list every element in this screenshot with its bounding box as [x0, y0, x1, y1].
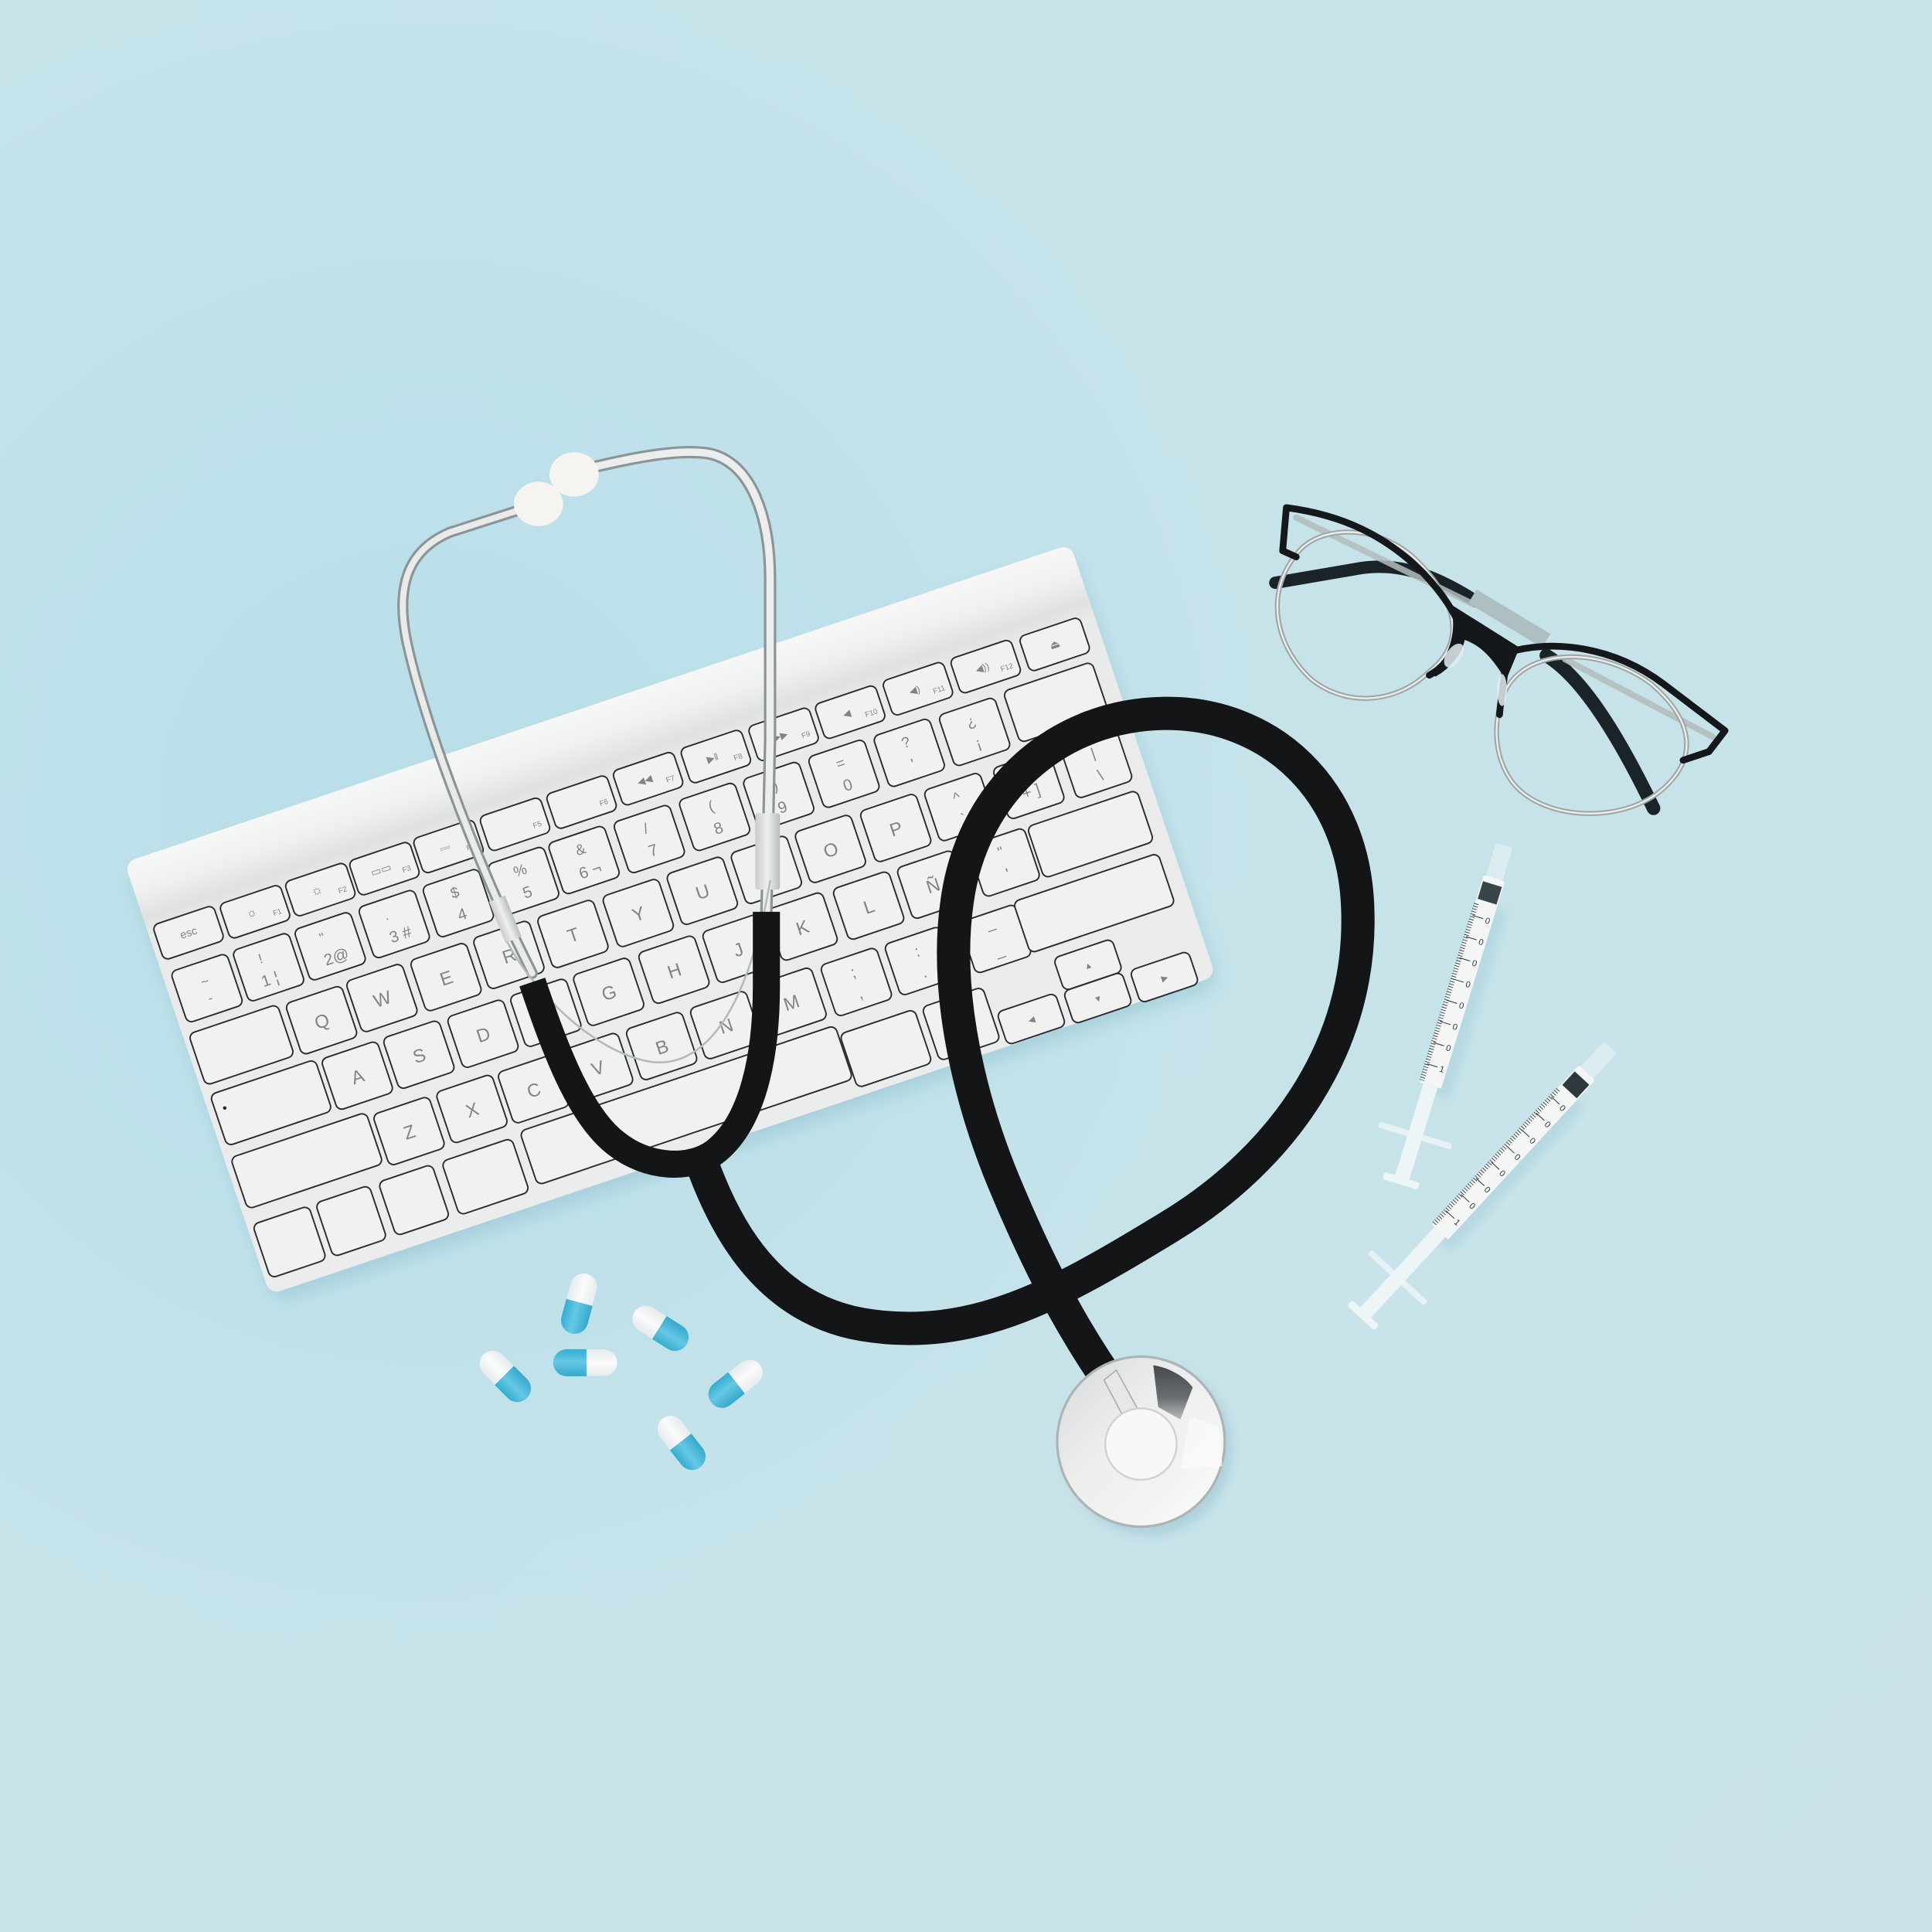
keyboard function row: ▫▫▫ — [438, 841, 452, 855]
keyboard — [124, 544, 1219, 1304]
syringe barrel: 0 — [1527, 1136, 1537, 1146]
keyboard number row: 2@ — [321, 944, 351, 970]
keyboard function row: ☼ — [244, 905, 259, 921]
Y tube — [532, 912, 767, 1164]
keyboard home row: Ñ — [923, 874, 943, 898]
keyboard number row: ' — [909, 756, 917, 774]
pill 1 — [558, 1270, 600, 1337]
syringe bottom — [1332, 1022, 1638, 1344]
syringe shadow — [1433, 1091, 1585, 1253]
chestpiece highlight — [1180, 1417, 1223, 1469]
syringe cap — [1485, 842, 1512, 883]
keyboard number row: " — [318, 930, 327, 946]
chestpiece disc — [1057, 1356, 1225, 1526]
keyboard function row: F12 — [999, 662, 1015, 674]
binaural left metal tube — [403, 503, 543, 974]
keyboard number row: 6 ¬ — [577, 859, 604, 883]
keyboard function row: ▭▭ — [369, 861, 393, 879]
keyboard function row: ▶▶ — [771, 728, 789, 743]
keyboard function row: F4 — [465, 842, 477, 852]
keyboard number row: ) — [770, 777, 781, 794]
keyboard lower letter row: : — [912, 943, 922, 961]
keyboard function row: F6 — [598, 798, 610, 808]
syringe barrel: 1 — [1452, 1218, 1462, 1228]
pill 4 — [553, 1349, 617, 1376]
keyboard home row: F — [538, 1002, 555, 1026]
syringe barrel — [1432, 1084, 1577, 1240]
keyboard number row: $ — [448, 884, 462, 903]
keyboard QWERTY row: I — [761, 861, 773, 882]
keyboard lower letter row: Z — [401, 1121, 418, 1145]
main tube — [702, 713, 1358, 1378]
keyboard number row: ~ — [199, 973, 211, 990]
glasses — [1275, 508, 1725, 814]
syringe plunger — [1332, 1206, 1468, 1344]
glasses temple arms — [1275, 518, 1713, 808]
keyboard number row: 0 — [841, 776, 855, 795]
keyboard function row: esc — [179, 925, 199, 942]
chestpiece neck — [1104, 1370, 1144, 1427]
keyboard function row: F2 — [337, 885, 349, 896]
keyboard number row: % — [512, 862, 529, 881]
keyboard lower letter row: C — [525, 1079, 544, 1103]
keyboard function row: F7 — [665, 774, 676, 785]
pill 6 — [651, 1410, 711, 1475]
keyboard bottom row: ◀ — [1027, 1015, 1036, 1026]
keyboard number row: 5 — [521, 883, 535, 903]
pill 3 — [474, 1345, 536, 1408]
syringe plunger — [1363, 1074, 1467, 1196]
keyboard QWERTY row — [189, 729, 1133, 1086]
keyboard lower letter row: B — [653, 1036, 672, 1060]
keyboard function row: ⏏ — [1048, 638, 1062, 652]
syringe barrel: 0 — [1451, 1022, 1458, 1032]
syringe top — [1363, 834, 1541, 1196]
keyboard home row: D — [474, 1023, 493, 1047]
keyboard function row: ◀ — [842, 707, 852, 720]
right lens — [1497, 657, 1687, 814]
keyboard number row: 9 — [776, 798, 790, 818]
chestpiece reflection — [1153, 1366, 1192, 1420]
keyboard lower letter row: ; — [849, 964, 858, 981]
keyboard home row: S — [410, 1044, 429, 1068]
keyboard lower letter row: X — [463, 1099, 481, 1122]
binaural right metal tube — [579, 452, 770, 912]
pill 5 — [703, 1354, 768, 1413]
keyboard QWERTY row: W — [371, 987, 394, 1012]
keyboard home row: G — [599, 981, 619, 1005]
syringe barrel: 0 — [1482, 1185, 1492, 1196]
browline and bridge — [1283, 508, 1725, 760]
keyboard home row: A — [349, 1066, 367, 1089]
keyboard number row: 7 — [646, 841, 660, 861]
keyboard home row: J — [731, 939, 747, 961]
keyboard number row: ¿ — [964, 713, 978, 731]
syringe barrel: 0 — [1478, 937, 1485, 947]
syringe barrel: 0 — [1497, 1168, 1507, 1179]
keyboard lower letter row: M — [781, 991, 802, 1015]
keyboard function row: F10 — [864, 707, 879, 719]
keyboard number row: / — [641, 821, 651, 838]
keyboard QWERTY row: O — [821, 838, 841, 862]
keyboard QWERTY row: T — [565, 923, 583, 947]
keyboard QWERTY row: | — [1089, 746, 1097, 762]
keyboard bottom row — [253, 939, 1199, 1278]
keyboard number row — [170, 662, 1109, 1023]
keyboard number row: . — [382, 907, 390, 923]
syringe barrel: 0 — [1444, 1043, 1452, 1054]
metal sleeves — [489, 813, 780, 943]
keyboard QWERTY row: E — [437, 967, 456, 991]
keyboard bottom row: ▲ — [1083, 961, 1094, 972]
keyboard function row: ☼ — [308, 880, 325, 900]
keyboard function row: F11 — [932, 684, 946, 696]
keyboard shadow — [131, 556, 1219, 1304]
syringe barrel: 0 — [1467, 1202, 1477, 1212]
keyboard function row: F3 — [401, 864, 412, 875]
keyboard number row: 1 ¦ — [259, 968, 281, 991]
syringe barrel: 0 — [1484, 917, 1492, 927]
keyboard QWERTY row: ^ — [951, 790, 963, 807]
keyboard function row — [152, 617, 1091, 961]
stethoscope — [403, 452, 1358, 1378]
left lens — [1277, 532, 1453, 699]
keyboard number row: ¡ — [973, 734, 984, 753]
syringe barrel: 0 — [1512, 1152, 1522, 1162]
pills — [474, 1270, 768, 1475]
keyboard function row: F5 — [532, 820, 543, 831]
syringe cap — [1579, 1042, 1617, 1080]
syringe barrel: 0 — [1471, 958, 1478, 969]
bridge fill — [1435, 606, 1518, 678]
keyboard home row: L — [861, 896, 877, 919]
keyboard number row: 3 # — [387, 923, 414, 947]
keyboard QWERTY row: \ — [1096, 767, 1106, 784]
keyboard bottom row: ▼ — [1093, 994, 1104, 1005]
chestpiece shadow — [1065, 1362, 1232, 1536]
syringe barrel — [1420, 899, 1498, 1089]
keyboard home row: K — [794, 917, 812, 940]
keyboard function row: ◀◀ — [636, 772, 654, 788]
keyboard QWERTY row: Y — [630, 903, 648, 927]
keyboard home row: ' — [1004, 866, 1012, 883]
keyboard lower letter row: . — [920, 964, 929, 981]
keyboard bottom row: ▶ — [1160, 973, 1170, 984]
keyboard home row: " — [996, 844, 1006, 861]
keyboard QWERTY row: U — [693, 880, 713, 904]
keyboard function row: ◀) — [907, 683, 921, 697]
chestpiece — [1057, 1356, 1232, 1536]
keyboard QWERTY row: P — [887, 818, 906, 842]
ear tips — [514, 452, 599, 526]
keyboard lower letter row: V — [589, 1056, 607, 1080]
keyboard function row: ▶‖ — [705, 750, 719, 765]
keyboard home row — [210, 790, 1154, 1146]
keyboard QWERTY row: + ] — [1019, 781, 1043, 803]
syringe collar — [1557, 1065, 1595, 1104]
keyboard number row: ( — [706, 798, 716, 815]
keyboard number row: 8 — [712, 818, 726, 838]
keyboard number row: & — [573, 841, 588, 859]
keyboard number row: ? — [900, 734, 913, 752]
chestpiece centre — [1105, 1408, 1177, 1480]
keyboard function row: F8 — [733, 752, 743, 763]
syringe barrel: 0 — [1557, 1104, 1567, 1114]
pill 2 — [627, 1301, 694, 1356]
syringe barrel: 1 — [1438, 1065, 1445, 1075]
keyboard body — [124, 544, 1216, 1294]
keyboard home row: H — [665, 959, 684, 983]
syringe barrel: 0 — [1464, 980, 1471, 990]
keyboard number row: = — [834, 755, 848, 773]
keyboard number row: 4 — [455, 905, 469, 924]
keyboard lower letter row: – — [985, 920, 1000, 939]
clear spring tube — [508, 881, 770, 1063]
keyboard lower letter row: , — [855, 985, 866, 1003]
syringe barrel: 0 — [1543, 1120, 1552, 1130]
keyboard lower letter row — [230, 853, 1175, 1209]
syringe shadow — [1426, 903, 1508, 1099]
keyboard number row: ! — [257, 951, 265, 967]
keyboard number row: - — [206, 990, 215, 1006]
keyboard QWERTY row: R — [500, 944, 519, 968]
keyboard QWERTY row: ` — [959, 811, 969, 828]
keyboard function row: F1 — [272, 907, 283, 918]
syringe collar — [1475, 875, 1505, 910]
keyboard function row: F9 — [801, 730, 811, 740]
nose pads — [1440, 640, 1507, 706]
keyboard QWERTY row: Q — [312, 1009, 332, 1034]
keyboard lower letter row: N — [716, 1015, 736, 1039]
keyboard function row: ◀)) — [974, 660, 991, 675]
keyboard lower letter row: _ — [992, 940, 1007, 961]
syringe barrel: 0 — [1458, 1001, 1465, 1012]
